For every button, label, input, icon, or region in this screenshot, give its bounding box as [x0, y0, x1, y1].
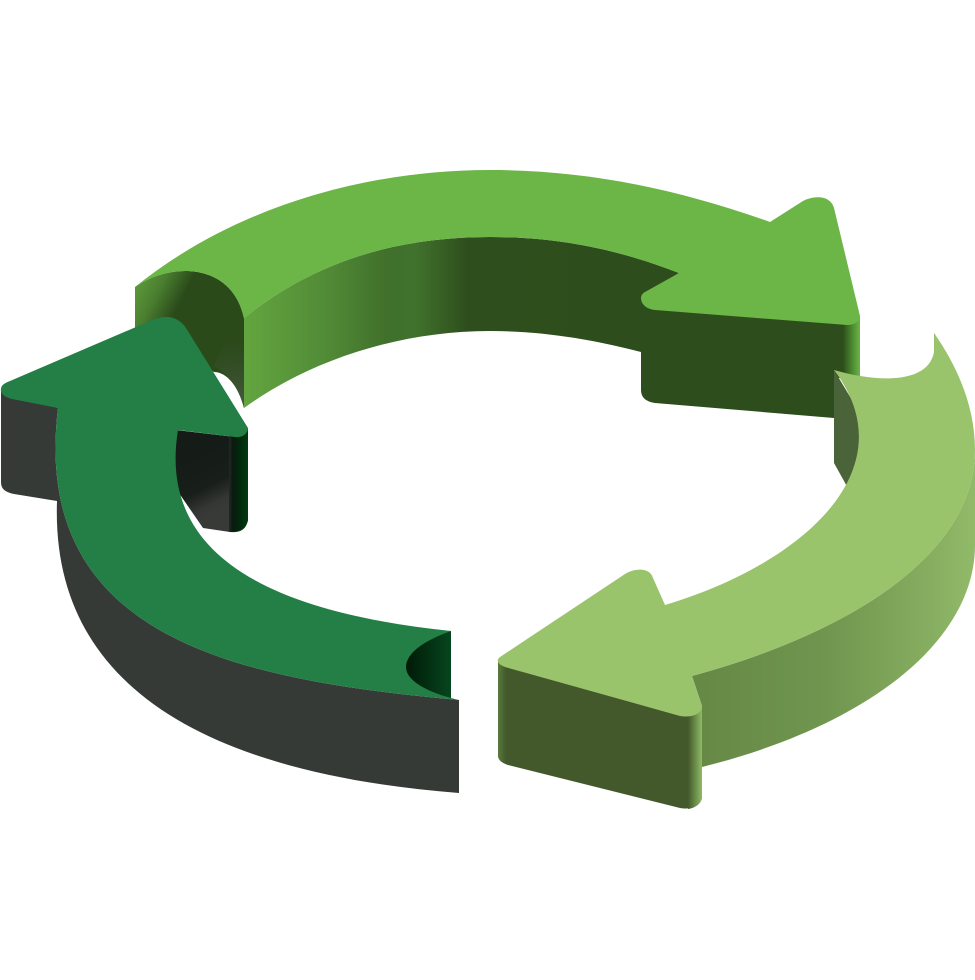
inner curved side — [244, 237, 679, 408]
inner arrowhead side — [170, 428, 248, 532]
arrow: dark green left arrow — [1, 317, 459, 793]
notch end side — [135, 271, 244, 408]
outer curved side — [692, 450, 975, 767]
arrow: mid green top arrow — [135, 170, 860, 418]
arrowhead edge highlight — [843, 316, 860, 378]
outer curved side and arrowhead side — [1, 390, 459, 793]
top notch small side — [934, 333, 937, 352]
inner arrowhead edge — [229, 428, 248, 532]
notch light reflection — [214, 330, 244, 408]
top face — [135, 170, 860, 325]
top face — [498, 333, 975, 716]
top face — [1, 317, 459, 700]
arrowhead side — [641, 296, 860, 418]
arrowhead edge highlight — [688, 706, 702, 809]
arrowhead tip highlight — [498, 660, 506, 764]
arrowhead side — [498, 660, 702, 809]
notch end side — [406, 631, 451, 698]
arrow: light green right arrow — [498, 333, 975, 809]
notch end side — [834, 370, 870, 490]
